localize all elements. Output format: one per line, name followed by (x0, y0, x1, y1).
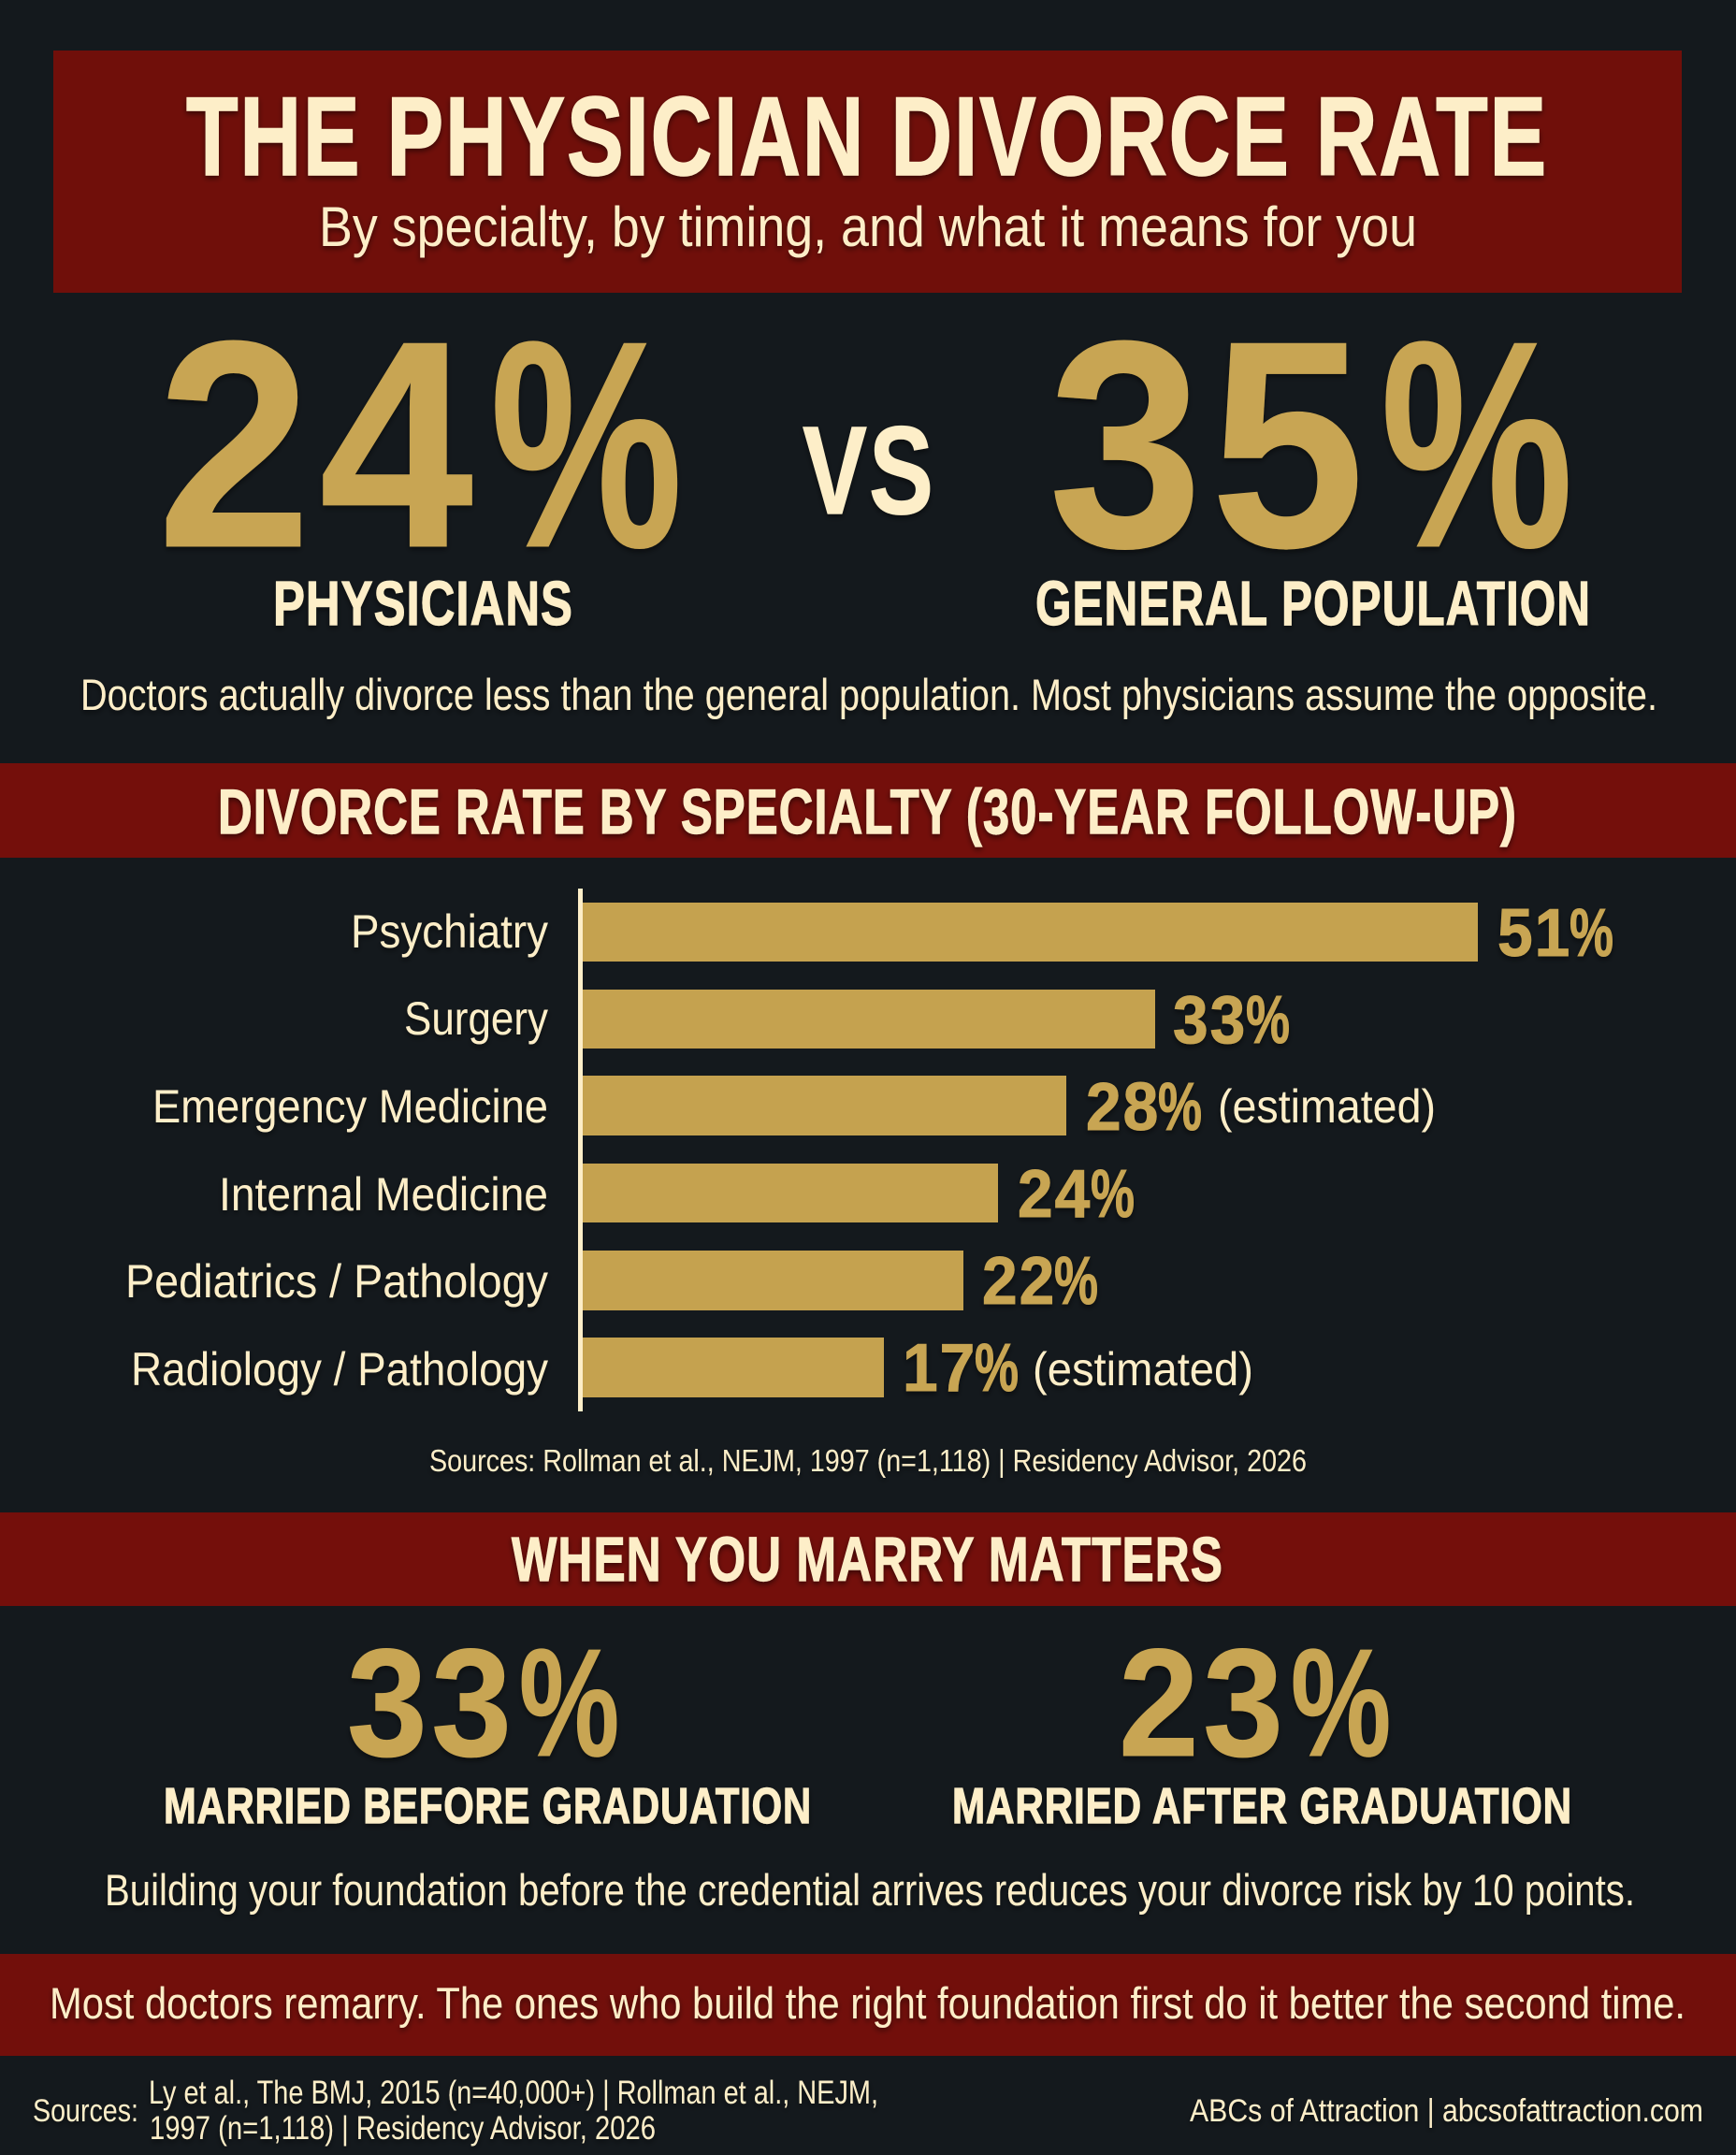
bar: Psychiatry 51% (351, 895, 1613, 971)
panel: title banner (53, 51, 1682, 293)
stat: physicians 24%: % (490, 280, 683, 609)
bar: Surgery 33% (404, 982, 1290, 1058)
bar: Surgery 33%: Surgery (404, 992, 548, 1045)
bar: Psychiatry 51%: 51 (1497, 895, 1571, 970)
bar: Pediatrics / Pathology 22% (125, 1243, 1098, 1319)
stat: married after graduation 23%: % (1291, 1618, 1391, 1788)
stat: general population 35%: % (1381, 280, 1573, 609)
panel: headline comparison (80, 280, 1657, 719)
panel: timing heading band (0, 1512, 1736, 1606)
panel: marriage timing stats (105, 1617, 1635, 1915)
panel: timing heading band: WHEN YOU MARRY MATTERS (512, 1525, 1223, 1595)
bar: Radiology / Pathology 17% (131, 1330, 1253, 1406)
stat: married before graduation 33%: 33 (347, 1617, 515, 1788)
bar: Pediatrics / Pathology 22%: Pediatrics / Pathology (125, 1255, 548, 1308)
bar: Emergency Medicine 28%: % (1158, 1070, 1202, 1145)
footer source list: Ly et al., The BMJ, 2015 (n=40,000+) | Rollman et al., NEJM, (149, 2075, 878, 2111)
bar: Radiology / Pathology 17%: Radiology / Pathology (131, 1343, 548, 1396)
bar: Internal Medicine 24%: 24 (1018, 1156, 1092, 1231)
panel: specialty heading band (0, 763, 1736, 858)
stat: married after graduation 23%: 23 (1119, 1617, 1287, 1788)
bar: Internal Medicine 24%: Internal Medicine (219, 1168, 548, 1221)
footer source list (149, 2075, 878, 2147)
stat: married before graduation 33% (164, 1617, 812, 1834)
stat: physicians 24% (157, 280, 683, 639)
bar: Psychiatry 51%: % (1570, 896, 1613, 971)
stat: married before graduation 33%: MARRIED BEFORE GRADUATION (164, 1778, 812, 1834)
bar: Emergency Medicine 28%: 28 (1086, 1069, 1160, 1144)
stat: married after graduation 23% (952, 1617, 1572, 1834)
label: versus: VS (803, 401, 935, 541)
bar: Radiology / Pathology 17%: 17 (903, 1330, 976, 1405)
bar: Internal Medicine 24% (219, 1156, 1135, 1232)
bar: Surgery 33%: % (1246, 983, 1290, 1058)
bar: Emergency Medicine 28%: (estimated) (1218, 1080, 1436, 1133)
bar: Internal Medicine 24%: % (1091, 1157, 1135, 1232)
subtitle: By specialty, by timing, and what it means for you (319, 195, 1417, 258)
bar: Emergency Medicine 28% (152, 1069, 1436, 1145)
bar: Pediatrics / Pathology 22%: % (1054, 1244, 1098, 1319)
footer source list: 1997 (n=1,118) | Residency Advisor, 2026 (150, 2110, 656, 2147)
stat: physicians 24%: PHYSICIANS (273, 569, 573, 639)
bar: Radiology / Pathology 17%: (estimated) (1033, 1343, 1253, 1396)
bar: Psychiatry 51%: Psychiatry (351, 905, 548, 958)
bar: Surgery 33%: 33 (1173, 982, 1247, 1057)
callout: remarriage band (0, 1954, 1736, 2056)
bar chart: divorce rate by specialty (125, 889, 1613, 1411)
bar: Emergency Medicine 28%: Emergency Medicine (152, 1080, 548, 1133)
footer sources label: Sources: (33, 2093, 138, 2129)
stat: physicians 24%: 24 (157, 280, 482, 609)
stat: married before graduation 33%: % (519, 1618, 619, 1788)
bar: Radiology / Pathology 17%: % (975, 1331, 1019, 1406)
bar: Pediatrics / Pathology 22%: 22 (982, 1243, 1056, 1318)
footer (33, 2075, 1703, 2147)
text: chart sources: Sources: Rollman et al., NEJM, 1997 (n=1,118) | Residency Advisor, 2026 (429, 1443, 1307, 1478)
stat: general population 35%: 35 (1049, 280, 1373, 609)
stat: married after graduation 23%: MARRIED AFTER GRADUATION (952, 1778, 1572, 1834)
stat: general population 35% (1035, 280, 1591, 639)
